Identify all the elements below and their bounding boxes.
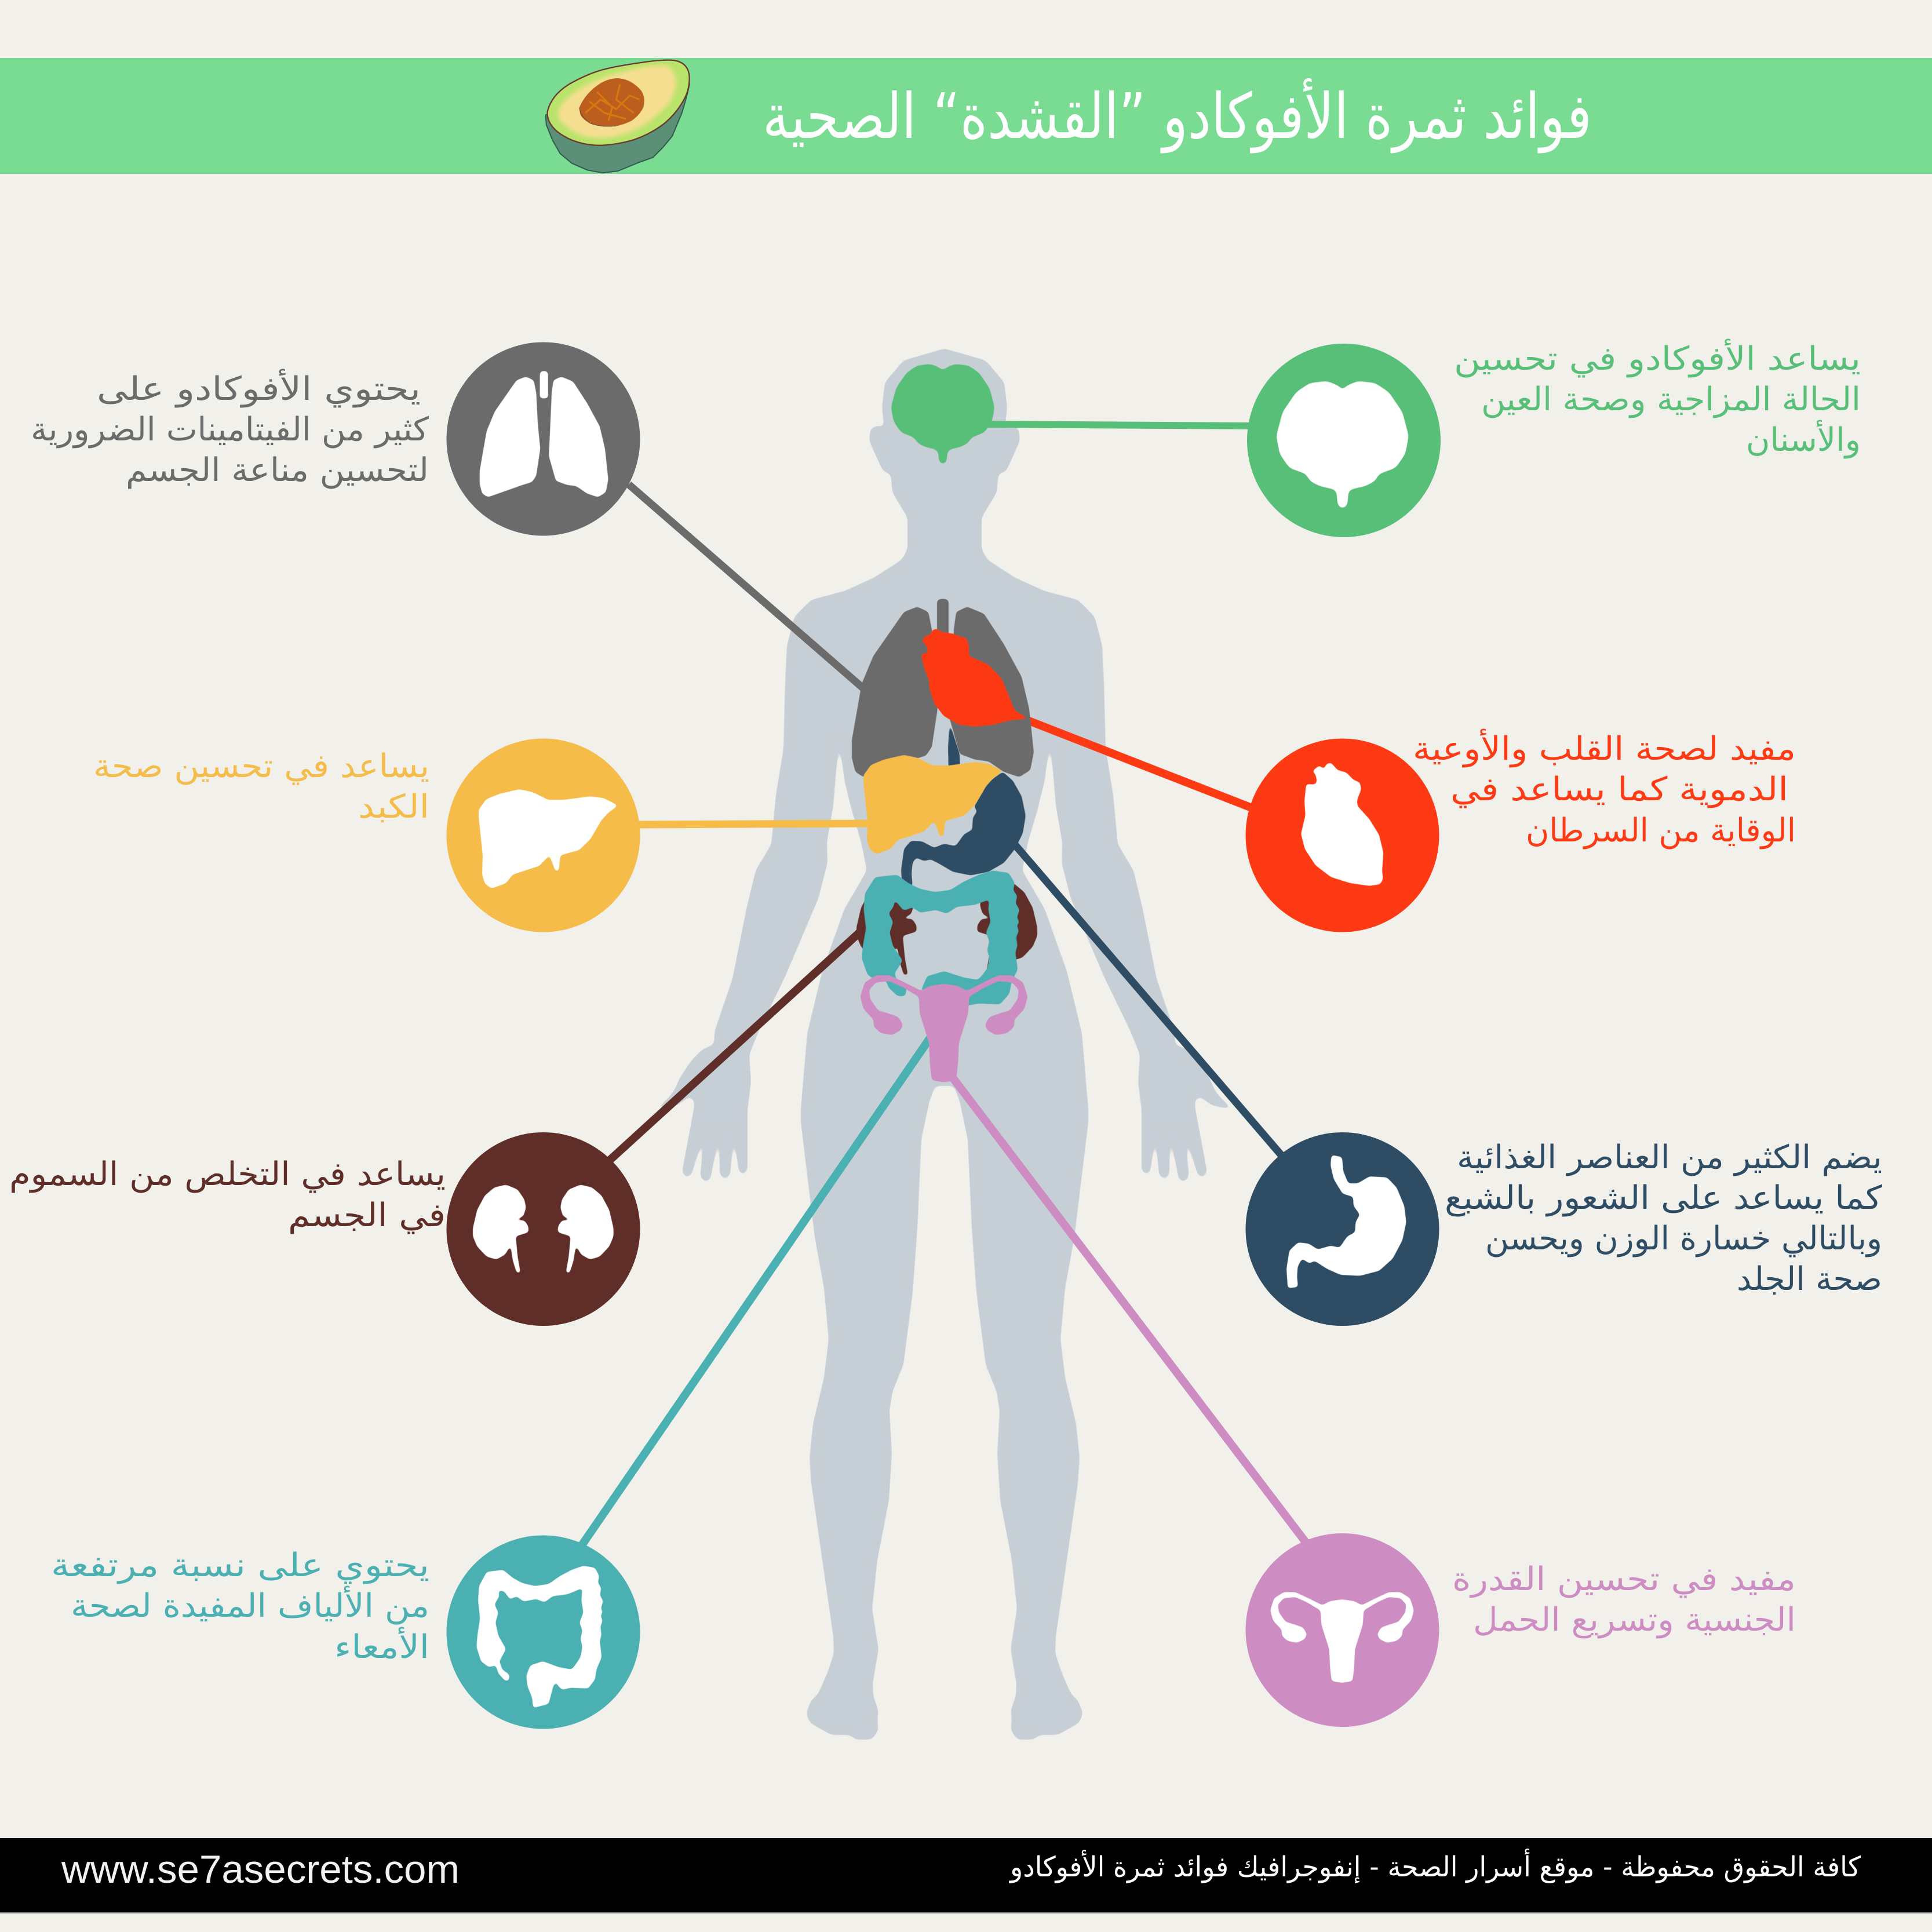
icon: avocado (546, 60, 690, 173)
panel: heart benefit (1246, 728, 1796, 932)
text: uterus benefit (1452, 1561, 1796, 1639)
organ: stomach (901, 723, 1026, 888)
icon: stomach circle (1246, 1132, 1439, 1326)
text: heart benefit: الوقاية من السرطان (1526, 812, 1796, 850)
copyright line: كافة الحقوق محفوظة - موقع أسرار الصحة - إنفوجرافيك فوائد ثمرة الأفوكادو (1009, 1849, 1861, 1883)
text: colon benefit (51, 1547, 429, 1666)
connector: kidneys (608, 929, 863, 1161)
website url: www.se7asecrets.com (61, 1847, 460, 1891)
icon: lungs circle (446, 342, 640, 535)
panel: liver benefit (93, 738, 640, 932)
text: stomach benefit: كما يساعد على الشعور بالشبع (1445, 1179, 1882, 1217)
text: uterus benefit: الجنسية وتسريع الحمل (1473, 1601, 1796, 1639)
panel: uterus benefit (1246, 1533, 1796, 1727)
text: lungs benefit: يحتوي الأفوكادو على (97, 369, 421, 408)
text: stomach benefit: صحة الجلد (1737, 1260, 1882, 1298)
icon: uterus circle (1246, 1533, 1439, 1727)
icon: kidneys circle (446, 1132, 640, 1326)
panel: brain benefit (1247, 338, 1861, 537)
organ: kidneys (856, 881, 1037, 975)
text: stomach benefit: وبالتالي خسارة الوزن ويحسن (1485, 1220, 1882, 1257)
text: heart benefit: الدموية كما يساعد في (1450, 771, 1788, 808)
text: colon benefit: من الألياف المفيدة لصحة (71, 1585, 429, 1625)
text: lungs benefit: لتحسين مناعة الجسم (126, 451, 429, 489)
text: liver benefit (93, 748, 429, 826)
text: brain benefit: الحالة المزاجية وصحة العين (1481, 381, 1861, 418)
connector: uterus (953, 1078, 1307, 1544)
icon: heart circle (1246, 738, 1439, 932)
organ: liver (863, 755, 1003, 854)
panel: lungs benefit (31, 342, 640, 535)
text: stomach benefit: يضم الكثير من العناصر الغذائية (1457, 1139, 1882, 1176)
text: liver benefit: الكبد (358, 788, 429, 826)
text: kidneys benefit: يساعد في التخلص من السموم (9, 1155, 446, 1193)
text: lungs benefit: كثير من الفيتامينات الضرورية (31, 411, 429, 449)
connector: colon (581, 1038, 930, 1546)
organ: uterus (860, 975, 1028, 1082)
text: brain benefit (1454, 338, 1861, 459)
text: colon benefit: الأمعاء (334, 1627, 429, 1666)
text: uterus benefit: مفيد في تحسين القدرة (1452, 1561, 1796, 1598)
text: colon benefit: يحتوي على نسبة مرتفعة (51, 1547, 429, 1584)
organ: lungs (852, 599, 1034, 777)
panel: colon benefit (51, 1536, 640, 1729)
body silhouette (655, 348, 1234, 1740)
header band (0, 58, 1932, 174)
connector: stomach (1014, 844, 1284, 1158)
organ: heart (921, 628, 1029, 727)
text: liver benefit: يساعد في تحسين صحة (93, 748, 429, 785)
icon: brain circle (1247, 344, 1441, 537)
connector: brain (985, 424, 1255, 426)
text: heart benefit: مفيد لصحة القلب والأوعية (1413, 728, 1796, 768)
icon: liver circle (446, 738, 640, 932)
organ: brain (891, 364, 994, 465)
text: brain benefit: يساعد الأفوكادو في تحسين (1454, 338, 1861, 378)
text: kidneys benefit (9, 1155, 446, 1234)
connector: liver (637, 823, 872, 825)
icon: colon circle (446, 1536, 640, 1729)
text: kidneys benefit: في الجسم (288, 1197, 446, 1234)
panel: stomach benefit (1246, 1132, 1882, 1326)
title: فوائد ثمرة الأفوكادو ”القشدة“ الصحية (763, 78, 1592, 154)
text: heart benefit (1413, 728, 1796, 850)
text: lungs benefit (31, 369, 429, 489)
text: stomach benefit (1445, 1139, 1882, 1298)
text: brain benefit: والأسنان (1746, 420, 1861, 459)
organ: colon (864, 873, 1017, 1023)
connector: heart (1011, 714, 1255, 809)
connector: lungs (629, 484, 863, 688)
panel: kidneys benefit (9, 1132, 640, 1326)
footer band (0, 1838, 1932, 1913)
